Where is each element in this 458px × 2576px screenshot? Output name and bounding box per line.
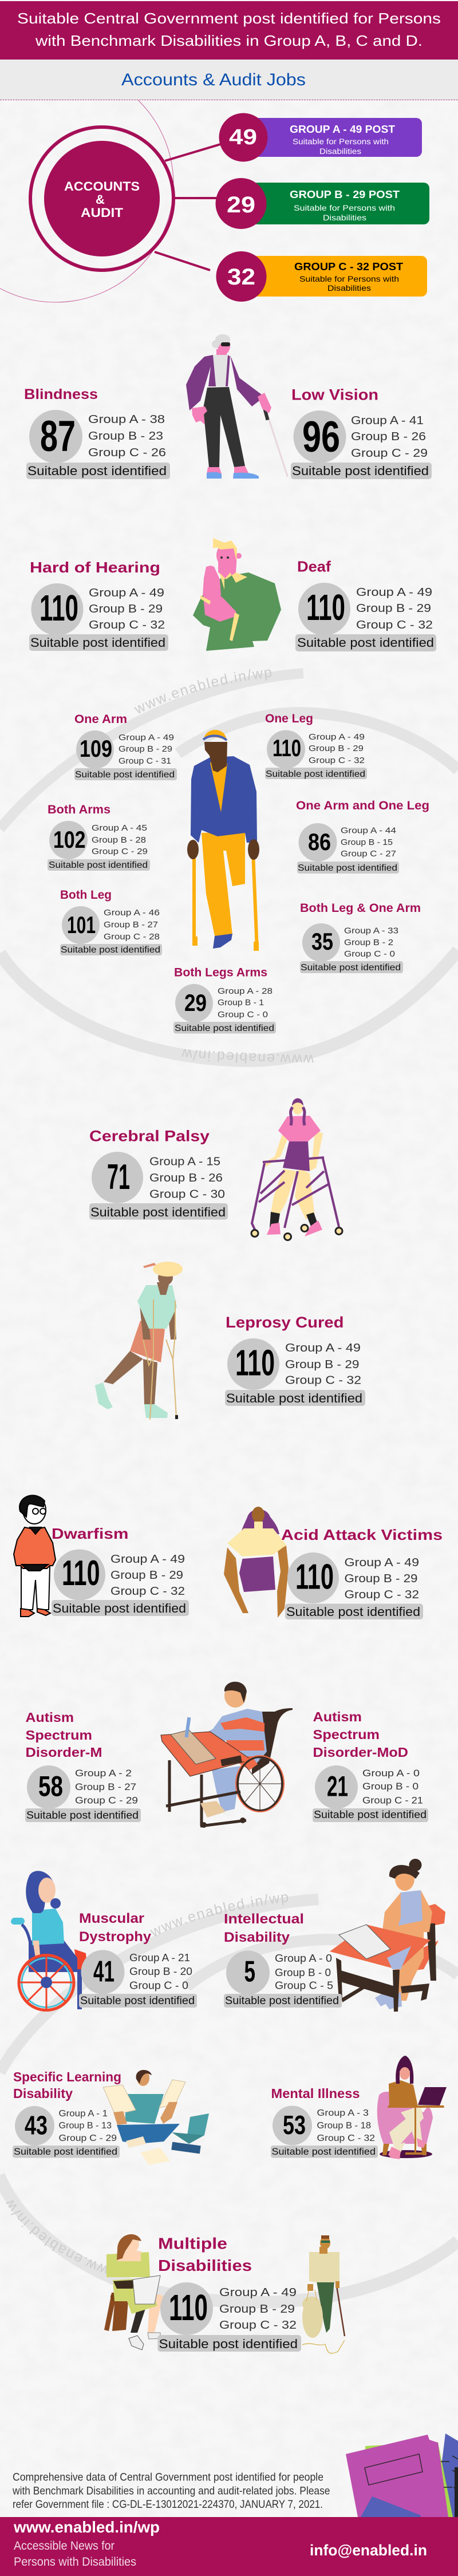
- group counts: Group B - 18: [317, 2121, 371, 2131]
- caption: Suitable post identified: [266, 769, 365, 779]
- group counts: Group B - 28: [92, 835, 146, 845]
- group counts: Group A - 46: [104, 908, 160, 918]
- total circle: [267, 730, 305, 768]
- heading: Both Legs Arms: [174, 966, 267, 979]
- heading: Both Arms: [48, 803, 110, 816]
- total circle: 110: [62, 1554, 100, 1593]
- group counts: Group C - 29: [75, 1795, 138, 1805]
- subtitle band: Accounts & Audit Jobs: [121, 70, 306, 89]
- heading: Blindness: [24, 386, 98, 402]
- group counts: Group A - 21: [129, 1952, 190, 1963]
- total circle: [226, 1951, 270, 1994]
- central hub circle: ACCOUNTS: [64, 179, 140, 193]
- heading: Specific Learning: [13, 2069, 121, 2084]
- group counts: Group A - 49: [110, 1553, 185, 1566]
- group counts: [129, 1952, 192, 1992]
- caption: Suitable post identified: [159, 2337, 298, 2351]
- source note: Comprehensive data of Central Government post identified for people: [13, 2471, 323, 2483]
- stat block: Low Vision: [291, 386, 432, 479]
- heading: [79, 1911, 152, 1945]
- group counts: Group A - 49: [345, 1556, 419, 1569]
- total circle: 43: [25, 2110, 48, 2140]
- group counts: Group A - 33: [344, 926, 398, 935]
- total circle: [27, 1765, 70, 1809]
- illustration: woman with prosthetic leg on stool: [104, 2234, 163, 2350]
- group counts: Group A - 41: [351, 414, 424, 427]
- total circle: [15, 2106, 54, 2146]
- illustration: short-statured man: [14, 1495, 56, 1617]
- group counts: Group C - 31: [119, 756, 171, 766]
- illustration: man signing with hands: [193, 538, 281, 651]
- total circle: 110: [235, 1342, 275, 1383]
- group counts: Group A - 1: [58, 2109, 108, 2119]
- group counts: [356, 586, 433, 631]
- source note: with Benchmark Disabilities in accounting and audit-related jobs. Please: [12, 2485, 330, 2498]
- total circle: 101: [67, 911, 96, 938]
- caption: Suitable post identified: [27, 464, 167, 478]
- group counts: [58, 2109, 117, 2143]
- total circle: [49, 821, 88, 859]
- caption: Suitable post identified: [175, 1024, 274, 1033]
- total circle: [160, 2282, 213, 2335]
- group counts: Group C - 32: [89, 619, 165, 631]
- group counts: Group A - 0: [362, 1768, 420, 1779]
- group counts: [285, 1342, 361, 1386]
- total circle: 21: [327, 1771, 348, 1803]
- heading: [25, 1710, 102, 1760]
- heading: [313, 1709, 408, 1760]
- total circle: [298, 583, 350, 635]
- group counts: Group C - 32: [309, 756, 365, 765]
- group counts: Group B - 29: [219, 2303, 295, 2316]
- group counts: Group A - 28: [218, 986, 273, 996]
- total circle: [175, 984, 213, 1022]
- Group A card: Suitable for Persons with: [293, 137, 389, 146]
- total circle: 41: [93, 1955, 114, 1989]
- heading: Intellectual: [224, 1911, 304, 1927]
- group counts: Group B - 29: [285, 1358, 360, 1371]
- illustration: woman with long arms and cream top: [224, 1507, 289, 1618]
- caption: Suitable post identified: [75, 770, 175, 780]
- connector lines: [155, 144, 220, 270]
- group counts: [104, 908, 160, 942]
- group counts: Group C - 5: [275, 1980, 333, 1992]
- overview diagram: accounts and audit groups: [0, 100, 429, 302]
- total circle: [227, 1338, 279, 1390]
- group counts: Group C - 0: [344, 949, 395, 959]
- total circle: 29: [184, 989, 207, 1016]
- total circle: [287, 1552, 339, 1603]
- stat block: Autism Spectrum Disorder-M: [25, 1710, 141, 1822]
- total circle: [62, 906, 100, 944]
- heading: Disability: [224, 1930, 290, 1945]
- total circle: [315, 1765, 358, 1809]
- Group C card: Suitable for Persons with: [299, 274, 399, 283]
- stat block: Acid Attack Victims: [281, 1526, 443, 1619]
- group counts: [341, 825, 396, 859]
- group counts: Group B - 15: [341, 837, 393, 847]
- group counts: Group C - 32: [356, 619, 433, 631]
- group counts: Group A - 49: [119, 733, 174, 742]
- title banner: Suitable Central Government post identified for Persons: [17, 10, 441, 27]
- illustration: woman with walker: [251, 1098, 342, 1240]
- group counts: Group A - 45: [92, 823, 147, 833]
- total circle: 110: [306, 587, 345, 628]
- stat block: Both Leg: [60, 888, 162, 955]
- total circle: [302, 923, 340, 962]
- caption: Suitable post identified: [297, 635, 434, 650]
- group counts: Group C - 26: [88, 447, 166, 459]
- group counts: Group C - 32: [110, 1585, 185, 1598]
- group counts: Group B - 29: [89, 603, 163, 615]
- total circle: 71: [107, 1157, 130, 1197]
- heading: Autism: [25, 1710, 74, 1725]
- watermark swirl: accounts section: www.enabled.in/wp: [181, 1049, 314, 1064]
- Group A card: Disabilities: [319, 147, 361, 156]
- illustration: woman with laptop in pink chair: [377, 2056, 447, 2159]
- Group C card: Disabilities: [327, 283, 371, 293]
- illustration: blind woman with cane: [186, 334, 287, 479]
- stat block: Intellectual Disability: [224, 1911, 342, 2008]
- group counts: Group A - 49: [309, 732, 365, 742]
- Group C card: 32: [227, 264, 255, 290]
- total circle: [29, 410, 82, 463]
- caption: Suitable post identified: [80, 1995, 195, 2007]
- total circle: [76, 730, 114, 769]
- heading: Mental Illness: [271, 2086, 360, 2101]
- total circle: 96: [302, 413, 340, 461]
- group counts: [88, 413, 166, 459]
- stat block: Both Arms: [48, 803, 150, 871]
- caption: Suitable post identified: [226, 1391, 362, 1405]
- central hub circle: AUDIT: [81, 206, 124, 220]
- group counts: [345, 1556, 419, 1601]
- stat block: Specific Learning Disability: [13, 2069, 121, 2158]
- caption: Suitable post identified: [30, 635, 165, 650]
- heading: Dystrophy: [79, 1929, 152, 1945]
- group counts: Group C - 27: [341, 849, 396, 859]
- group counts: [317, 2108, 375, 2143]
- group counts: Group B - 1: [218, 998, 264, 1008]
- total circle: [81, 1950, 125, 1994]
- illustration: man reading with laptop: [103, 2070, 209, 2165]
- stat block: Dwarfism: [52, 1525, 189, 1616]
- caption: Suitable post identified: [90, 1205, 226, 1219]
- stat block: Mental Illness: [271, 2086, 378, 2158]
- group counts: Group C - 0: [218, 1010, 268, 1020]
- group counts: [219, 2286, 297, 2332]
- group counts: Group C - 28: [104, 932, 160, 942]
- group counts: Group B - 20: [129, 1966, 192, 1977]
- stat block: Multiple Disabilities: [158, 2235, 301, 2352]
- caption: Suitable post identified: [298, 863, 397, 873]
- group counts: [351, 414, 428, 460]
- Group C card: [216, 251, 427, 302]
- Group B card: Disabilities: [323, 213, 366, 222]
- heading: Both Leg: [60, 888, 112, 902]
- group counts: Group C - 32: [219, 2319, 297, 2332]
- Group B card: GROUP B - 29 POST: [290, 189, 400, 200]
- group counts: Group B - 2: [344, 938, 393, 947]
- stat block: Cerebral Palsy: [89, 1128, 228, 1219]
- total circle: [299, 823, 337, 862]
- group counts: [362, 1768, 423, 1805]
- heading: [158, 2235, 252, 2274]
- heading: Deaf: [297, 558, 331, 575]
- total circle: [92, 1152, 143, 1203]
- total circle: 110: [169, 2287, 208, 2328]
- stat block: Both Legs Arms: [173, 966, 276, 1034]
- illustration: person on crutches: [95, 1262, 183, 1420]
- total circle: 53: [283, 2110, 306, 2140]
- heading: Multiple: [158, 2235, 227, 2253]
- caption: Suitable post identified: [286, 1605, 420, 1619]
- Group B card: Suitable for Persons with: [294, 203, 395, 212]
- group counts: Group B - 26: [351, 430, 426, 443]
- caption: Suitable post identified: [61, 945, 160, 955]
- heading: Spectrum: [313, 1727, 380, 1742]
- group counts: Group C - 32: [285, 1374, 361, 1386]
- caption: Suitable post identified: [14, 2146, 117, 2157]
- group counts: Group C - 0: [129, 1980, 188, 1992]
- illustration: man with amputated leg on crutches: [187, 730, 259, 951]
- group counts: [149, 1155, 225, 1201]
- group counts: Group B - 29: [119, 744, 172, 754]
- group counts: Group B - 29: [309, 744, 364, 753]
- group counts: [110, 1553, 185, 1598]
- group counts: Group A - 38: [88, 413, 165, 426]
- stat block: Blindness: [24, 386, 170, 479]
- central hub circle: &: [96, 192, 105, 207]
- group counts: [92, 823, 148, 856]
- group counts: Group A - 49: [219, 2286, 297, 2299]
- group counts: Group B - 27: [75, 1781, 136, 1792]
- Group A card: 49: [229, 125, 257, 149]
- total circle: 87: [40, 412, 76, 461]
- group counts: Group C - 29: [58, 2134, 117, 2143]
- heading: Disabilities: [158, 2257, 252, 2274]
- stat block: One Leg: [265, 712, 367, 779]
- stat block: One Arm and One Leg: [296, 799, 429, 874]
- group counts: Group C - 30: [149, 1188, 225, 1201]
- caption: Suitable post identified: [301, 963, 401, 973]
- group counts: [75, 1768, 138, 1805]
- stat block: Deaf: [295, 558, 436, 651]
- group counts: Group B - 29: [356, 602, 431, 615]
- group counts: Group A - 0: [275, 1953, 332, 1964]
- group counts: Group B - 27: [104, 920, 158, 930]
- caption: Suitable post identified: [53, 1601, 186, 1615]
- heading: Disability: [13, 2086, 73, 2101]
- heading: Disorder-MoD: [313, 1745, 408, 1760]
- heading: [224, 1911, 304, 1945]
- total circle: 109: [80, 735, 112, 762]
- group counts: Group A - 49: [285, 1342, 361, 1354]
- source note: [12, 2471, 330, 2511]
- heading: Cerebral Palsy: [89, 1128, 210, 1145]
- group counts: Group B - 26: [149, 1172, 223, 1184]
- stat block: Hard of Hearing: [29, 559, 168, 651]
- central hub circle: [30, 127, 173, 270]
- subtitle band: [0, 60, 458, 100]
- group counts: Group B - 0: [362, 1781, 418, 1792]
- source note: refer Government file : CG-DL-E-13012021-224370, JANUARY 7, 2021.: [13, 2498, 323, 2511]
- group counts: [344, 926, 398, 959]
- group counts: [218, 986, 273, 1020]
- group counts: Group B - 23: [88, 430, 163, 442]
- group counts: Group A - 15: [149, 1155, 220, 1168]
- illustration: woman in wheelchair: [11, 1871, 88, 2010]
- caption: Suitable post identified: [225, 1995, 339, 2007]
- footer bar: www.enabled.in/wp: [13, 2518, 160, 2536]
- caption: Suitable post identified: [314, 1809, 427, 1820]
- title banner: [0, 1, 458, 60]
- heading: Dwarfism: [52, 1525, 128, 1542]
- group counts: Group B - 13: [58, 2121, 112, 2131]
- group counts: [309, 732, 365, 765]
- group counts: [89, 587, 165, 631]
- group counts: Group A - 49: [356, 586, 432, 599]
- stat block: Muscular Dystrophy: [79, 1911, 197, 2008]
- heading: Autism: [313, 1709, 362, 1724]
- heading: One Arm: [74, 713, 127, 726]
- caption: Suitable post identified: [271, 2146, 376, 2157]
- stat block: Autism Spectrum Disorder-MoD: [313, 1709, 428, 1822]
- watermark swirl: accounts section: [0, 668, 458, 1067]
- illustration: blind man with guide dog: [302, 2235, 345, 2353]
- group counts: Group C - 32: [345, 1589, 419, 1601]
- heading: Both Leg & One Arm: [300, 902, 421, 915]
- watermark swirl: lower section: www.enabled.in/wp: [150, 1894, 288, 1936]
- total circle: 86: [308, 828, 331, 855]
- heading: Hard of Hearing: [30, 559, 160, 576]
- heading: Spectrum: [25, 1728, 92, 1743]
- stat block: Leprosy Cured: [225, 1314, 365, 1406]
- group counts: Group A - 44: [341, 825, 396, 836]
- group counts: [275, 1953, 333, 1992]
- heading: One Leg: [265, 712, 313, 725]
- group counts: Group C - 32: [317, 2134, 375, 2143]
- watermark swirl: accounts section: www.enabled.in/wp: [134, 669, 271, 713]
- total circle: [31, 583, 84, 635]
- stat block: One Arm: [74, 713, 177, 780]
- total circle: [273, 2105, 312, 2146]
- heading: Muscular: [79, 1911, 144, 1926]
- illustration: woman at craft table: [330, 1859, 445, 2012]
- footer bar: info@enabled.in: [310, 2542, 427, 2559]
- Group B card: 29: [227, 192, 255, 218]
- Group A card: [219, 113, 422, 161]
- group counts: [119, 733, 174, 766]
- caption: Suitable post identified: [292, 464, 429, 478]
- heading: [13, 2069, 121, 2101]
- stat block: Both Leg & One Arm: [300, 902, 421, 973]
- heading: Acid Attack Victims: [281, 1526, 443, 1543]
- illustration: boy in wheelchair at desk: [161, 1682, 293, 1828]
- total circle: 102: [53, 826, 86, 853]
- heading: Low Vision: [291, 386, 378, 403]
- Group A card: GROUP A - 49 POST: [290, 124, 395, 135]
- group counts: Group A - 2: [75, 1768, 132, 1779]
- group counts: Group A - 3: [317, 2108, 369, 2118]
- total circle: 5: [244, 1955, 255, 1989]
- footer bar: Accessible News for: [14, 2539, 114, 2553]
- heading: Leprosy Cured: [226, 1314, 344, 1331]
- total circle: 110: [295, 1557, 334, 1597]
- total circle: 35: [311, 928, 333, 955]
- group counts: Group C - 29: [351, 447, 428, 460]
- group counts: Group C - 29: [92, 847, 148, 856]
- icon: stacked folders: [346, 2433, 458, 2517]
- Group C card: GROUP C - 32 POST: [294, 261, 403, 272]
- footer bar: Persons with Disabilities: [14, 2555, 136, 2569]
- total circle: 58: [38, 1771, 63, 1803]
- group counts: Group B - 29: [345, 1573, 418, 1585]
- group counts: Group A - 49: [89, 587, 164, 599]
- group counts: Group B - 29: [110, 1569, 183, 1582]
- group counts: Group C - 21: [362, 1795, 423, 1805]
- group counts: Group B - 0: [275, 1967, 331, 1978]
- total circle: 110: [40, 587, 78, 629]
- Group B card: [215, 178, 429, 229]
- total circle: 110: [273, 734, 301, 761]
- caption: Suitable post identified: [26, 1809, 139, 1821]
- title banner: with Benchmark Disabilities in Group A, B, C and D.: [35, 32, 423, 49]
- caption: Suitable post identified: [49, 860, 148, 870]
- heading: One Arm and One Leg: [296, 799, 429, 812]
- footer bar: [0, 2517, 458, 2576]
- heading: Disorder-M: [25, 1745, 102, 1760]
- total circle: [54, 1549, 105, 1601]
